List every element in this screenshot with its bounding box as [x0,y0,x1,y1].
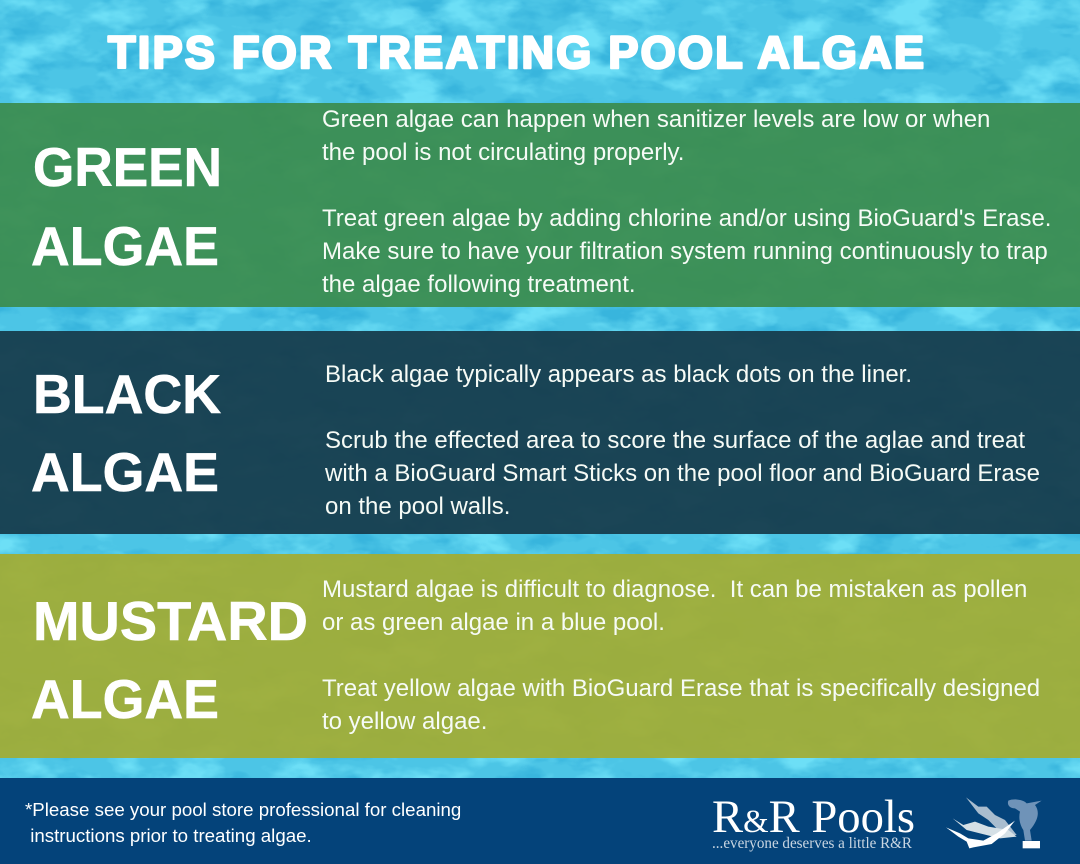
text: mustard algae description: Mustard algae is difficult to diagnose. It can be mistaken as pollen [322,576,1027,603]
logo: R&amp;R Pools wordmark: ...everyone deserves a little R&R [712,835,912,852]
text: green algae description: the pool is not circulating properly. [322,139,684,166]
footer note: *Please see your pool store professional for cleaning [25,799,461,820]
panel: mustard algae [0,554,1080,758]
icon: diving swimmer sequence [946,797,1042,848]
text: green algae description: Treat green algae by adding chlorine and/or using BioGuard's Erase. [322,205,1051,232]
text: black algae description: Black algae typically appears as black dots on the liner. [325,361,912,388]
text: mustard algae description: to yellow algae. [322,708,487,735]
panel: black algae [0,331,1080,534]
heading: black algae: BLACK [33,363,221,425]
text: green algae description: Green algae can happen when sanitizer levels are low or when [322,106,990,133]
panel: green algae [0,103,1080,307]
text: mustard algae description: or as green algae in a blue pool. [322,609,665,636]
text: black algae description: on the pool walls. [325,493,510,520]
footer note: instructions prior to treating algae. [25,825,312,846]
heading: mustard algae [31,590,308,730]
text: green algae description: the algae following treatment. [322,271,636,298]
footer bar [0,778,1080,864]
text: black algae description: with a BioGuard Smart Sticks on the pool floor and BioGuard Erase [324,460,1040,487]
heading: green algae: ALGAE [31,215,219,277]
heading: mustard algae: ALGAE [31,668,219,730]
text: green algae description: Make sure to have your filtration system running continuously to trap [322,238,1048,265]
text: mustard algae description: Treat yellow algae with BioGuard Erase that is specifically designed [322,675,1040,702]
title: TIPS FOR TREATING POOL ALGAE [108,27,924,78]
heading: mustard algae: MUSTARD [33,590,308,652]
heading: black algae: ALGAE [31,441,219,503]
text: black algae description: Scrub the effected area to score the surface of the aglae and treat [325,427,1025,454]
logo: R&amp;R Pools wordmark: R&R Pools [712,791,915,843]
heading: black algae [31,363,221,503]
heading: green algae: GREEN [33,136,222,198]
heading: green algae [31,136,222,277]
